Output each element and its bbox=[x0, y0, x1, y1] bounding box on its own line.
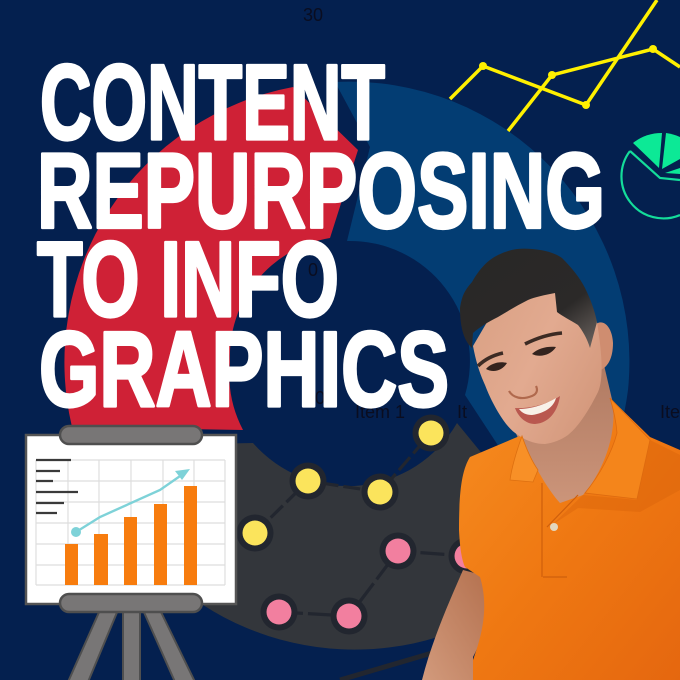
faint axis labels: 0 bbox=[308, 260, 318, 280]
teeth bbox=[519, 398, 556, 415]
presentation board icon bbox=[26, 426, 236, 680]
eyebrows bbox=[478, 333, 562, 366]
collar left bbox=[510, 436, 538, 482]
button bbox=[550, 523, 558, 531]
neck bbox=[510, 365, 618, 510]
donut segment: dark grey bbox=[150, 423, 560, 650]
title: GRAPHICS bbox=[39, 309, 449, 429]
title: CONTENT bbox=[40, 42, 385, 162]
faint axis labels: Ite bbox=[660, 402, 680, 422]
yellow node path bbox=[236, 414, 450, 552]
collar right bbox=[585, 398, 650, 499]
arm bbox=[422, 570, 487, 680]
pink node path bbox=[260, 532, 486, 634]
faint axis labels: Item 1 bbox=[355, 402, 405, 422]
face bbox=[473, 290, 602, 444]
title bbox=[37, 42, 605, 429]
donut segment: red bbox=[64, 87, 358, 430]
faint axis labels bbox=[303, 5, 680, 422]
faint axis labels: 30 bbox=[303, 5, 323, 25]
shirt bbox=[459, 400, 680, 680]
presenter portrait bbox=[422, 249, 680, 680]
placket bbox=[542, 483, 578, 577]
pie chart icon bbox=[621, 133, 680, 218]
yellow line chart bbox=[450, 0, 680, 131]
nose bbox=[509, 386, 537, 398]
ear bbox=[595, 322, 613, 371]
smile lips bbox=[515, 396, 560, 424]
collar shadow bbox=[552, 440, 680, 525]
faint axis labels: 0 bbox=[315, 388, 325, 408]
title: TO INFO bbox=[37, 219, 339, 339]
hair bbox=[460, 249, 597, 348]
faint axis labels: It bbox=[457, 402, 467, 422]
donut segment: blue bbox=[335, 82, 629, 540]
dark connector line bbox=[340, 653, 432, 680]
eyes bbox=[486, 347, 556, 371]
